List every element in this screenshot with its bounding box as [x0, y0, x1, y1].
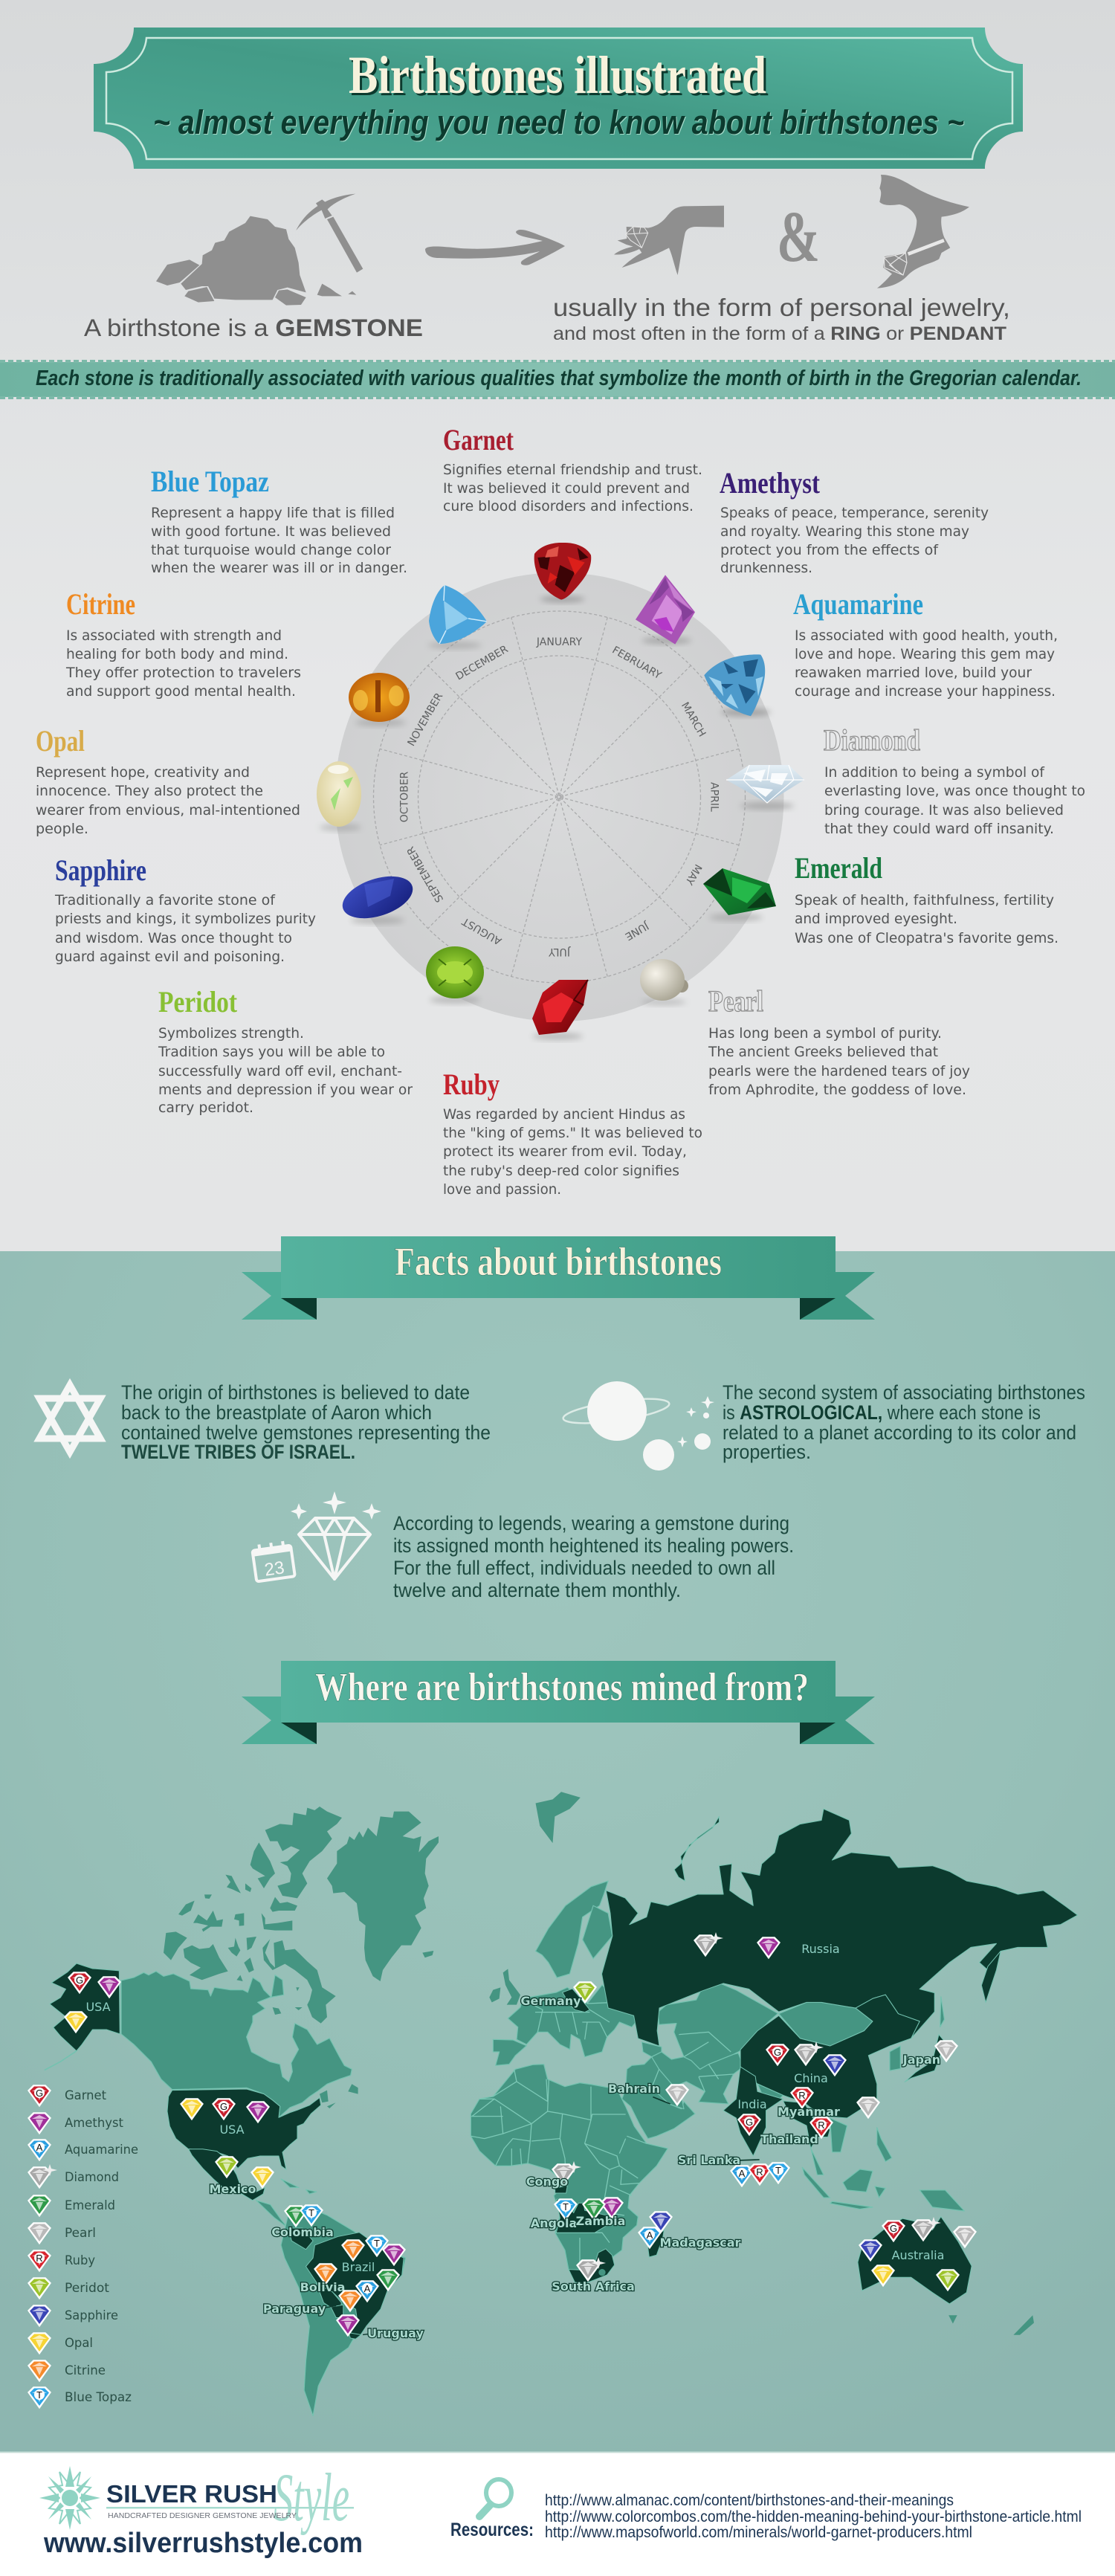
markers: Australia — [859, 2217, 976, 2291]
text block: blue topaz: Blue Topaz — [151, 465, 269, 498]
legend: R — [36, 2253, 43, 2264]
ribbon: facts about birthstones — [242, 1236, 875, 1320]
title banner — [94, 28, 1023, 169]
wheel of months — [334, 572, 783, 1021]
text block: diamond: bring courage. It was also believed — [824, 802, 1064, 819]
fact: twelve tribes: TWELVE TRIBES OF ISRAEL. — [121, 1441, 355, 1463]
text block: pearl — [708, 984, 970, 1098]
text block: opal: innocence. They also protect the — [36, 783, 263, 799]
text block: emerald: Speak of health, faithfulness, fertility — [795, 892, 1054, 908]
title: Birthstones illustrated — [349, 45, 766, 105]
markers: Russia, Germany and Asia: R — [798, 2090, 806, 2101]
legend: Sapphire — [65, 2308, 118, 2323]
text block: ruby: Ruby — [443, 1068, 500, 1101]
logo: silver rush style: SILVER RUSH — [106, 2480, 277, 2508]
month labels: MARCH — [679, 700, 708, 739]
text block: aquamarine: Aquamarine — [793, 587, 923, 621]
text block: aquamarine: courage and increase your happiness. — [795, 683, 1056, 700]
markers: Russia, Germany and Asia: Sri Lanka — [678, 2153, 740, 2167]
text block: peridot: successfully ward off evil, enchant- — [158, 1063, 402, 1079]
gem: emerald — [703, 868, 776, 921]
fact: astrological: is ASTROLOGICAL, where each stone is — [723, 1401, 1041, 1424]
markers: Russia, Germany and Asia: A — [739, 2168, 746, 2179]
gem: garnet — [534, 543, 591, 603]
month labels: APRIL — [708, 782, 720, 812]
text block: ruby: Was regarded by ancient Hindus as — [443, 1106, 685, 1123]
text block: sapphire: Traditionally a favorite stone of — [54, 892, 276, 908]
text block: opal: wearer from envious, mal-intentioned — [36, 802, 300, 819]
gem: amethyst — [636, 575, 695, 645]
resources: http://www.mapsofworld.com/minerals/world-garnet-producers.html — [545, 2524, 972, 2541]
markers: Africa — [526, 2161, 741, 2293]
month labels: DECEMBER — [454, 643, 511, 682]
markers: Russia, Germany and Asia: China — [794, 2071, 828, 2085]
text block: ruby: love and passion. — [443, 1181, 561, 1198]
fact: astrological: properties. — [723, 1441, 811, 1463]
gem: citrine — [349, 673, 410, 726]
map: Russia, Asia and Oceania — [536, 1792, 1078, 2335]
markers: South America: Paraguay — [263, 2302, 326, 2316]
fact: twelve tribes — [121, 1381, 491, 1463]
fact: twelve tribes: back to the breastplate of Aaron which — [121, 1401, 432, 1424]
text block: amethyst: and royalty. Wearing this stone may — [720, 523, 969, 540]
gem: opal — [317, 761, 361, 831]
legend: Garnet — [65, 2088, 106, 2103]
logo: silver rush style: www.silverrushstyle.com — [43, 2528, 363, 2559]
markers: Alaska: G — [76, 1975, 83, 1986]
markers: Russia, Germany and Asia: India — [737, 2097, 767, 2111]
text block: amethyst: drunkenness. — [720, 560, 812, 576]
text block: citrine: Is associated with strength and — [66, 627, 282, 644]
legend: A — [36, 2142, 43, 2153]
text block: peridot — [158, 985, 413, 1116]
text block: ruby: the ruby's deep-red color signifies — [443, 1163, 679, 1179]
text block: pearl: The ancient Greeks believed that — [708, 1044, 938, 1060]
text block: citrine — [65, 587, 301, 700]
logo: silver rush style: HANDCRAFTED DESIGNER GEMSTONE JEWELRY — [108, 2512, 297, 2520]
legend: T — [36, 2389, 42, 2401]
markers: Africa: Zambia — [576, 2214, 625, 2228]
icon: magnifier — [479, 2479, 511, 2517]
month labels: JULY — [549, 946, 571, 958]
markers: Africa: Congo — [526, 2175, 568, 2189]
markers: Russia, Germany and Asia: Japan — [902, 2053, 940, 2067]
markers: Alaska: USA — [85, 2000, 111, 2014]
legend: G — [36, 2088, 43, 2099]
text block: amethyst: Amethyst — [720, 466, 821, 500]
resources: http://www.colorcombos.com/the-hidden-meaning-behind-your-birthstone-article.html — [545, 2508, 1082, 2525]
resources: http://www.almanac.com/content/birthstones-and-their-meanings — [545, 2492, 954, 2509]
text block: garnet: Signifies eternal friendship and trust. — [443, 462, 702, 478]
legend: Amethyst — [65, 2116, 123, 2131]
text block: ruby: the "king of gems." It was believed to — [443, 1125, 702, 1141]
fact: legends: its assigned month heightened its healing powers. — [393, 1534, 794, 1557]
text block: diamond: everlasting love, was once thought to — [824, 783, 1085, 799]
footer background — [0, 2452, 1115, 2576]
legend: Blue Topaz — [65, 2390, 132, 2405]
text block: blue topaz: when the wearer was ill or in danger. — [151, 560, 407, 576]
markers: USA and Mexico: G — [220, 2101, 227, 2112]
icon: hand with ring — [614, 206, 724, 275]
legend: Citrine — [65, 2363, 106, 2378]
markers: USA and Mexico — [181, 2099, 274, 2196]
markers: Russia, Germany and Asia — [520, 1932, 957, 2186]
fact: legends: For the full effect, individuals needed to own all — [393, 1557, 775, 1579]
markers: South America: T — [308, 2207, 314, 2218]
text block: citrine: and support good mental health. — [66, 683, 296, 700]
text block: blue topaz: with good fortune. It was believed — [151, 523, 391, 540]
markers: South America: Colombia — [271, 2225, 334, 2239]
text: jewelry: and most often in the form of a RING or PENDANT — [553, 323, 1006, 344]
text block: emerald: Emerald — [795, 851, 882, 885]
text block: blue topaz — [151, 465, 407, 576]
text block: peridot: Symbolizes strength. — [158, 1025, 304, 1042]
icon: star of david — [39, 1385, 100, 1452]
gem: aquamarine — [704, 654, 771, 717]
text block: opal — [36, 724, 300, 837]
fact: astrological: related to a planet according to its color and — [723, 1421, 1076, 1444]
background: top gray section — [0, 0, 1115, 1256]
month labels: JANUARY — [536, 636, 583, 648]
text block: citrine: They offer protection to travelers — [65, 665, 301, 681]
fact: twelve tribes: contained twelve gemstones representing the — [121, 1421, 491, 1444]
legend: Emerald — [65, 2198, 115, 2213]
markers: Russia, Germany and Asia: T — [775, 2165, 781, 2176]
month labels — [398, 636, 720, 958]
text block: diamond: that they could ward off insanity. — [824, 821, 1054, 837]
title: Birthstones illustrated — [351, 48, 769, 107]
gem: pearl — [640, 959, 688, 1005]
text block: emerald: Was one of Cleopatra's favorite gems. — [795, 930, 1059, 946]
month labels: SEPTEMBER — [404, 844, 446, 904]
text block: sapphire: Sapphire — [55, 853, 146, 887]
text: jewelry: usually in the form of personal jewelry, — [553, 294, 1010, 321]
text block: ruby — [443, 1068, 702, 1198]
markers: South America: Uruguay — [367, 2326, 424, 2340]
fact: legends: According to legends, wearing a gemstone during — [393, 1512, 789, 1534]
legend: Opal — [65, 2336, 93, 2351]
text block: diamond: Diamond — [824, 723, 920, 757]
markers: Africa: Madagascar — [660, 2236, 741, 2250]
text block: opal: Opal — [36, 724, 85, 758]
month labels: FEBRUARY — [610, 645, 664, 682]
markers: South America: Brazil — [342, 2260, 375, 2274]
month labels: AUGUST — [460, 914, 504, 947]
text block: opal: people. — [36, 821, 88, 837]
subtitle: ~ almost everything you need to know about birthstones ~ — [153, 103, 964, 141]
ribbon: facts about birthstones: Facts about birthstones — [395, 1239, 722, 1284]
legend: Diamond — [65, 2170, 119, 2185]
text block: amethyst: protect you from the effects of — [720, 542, 939, 558]
fact: legends — [393, 1512, 794, 1601]
text block: opal: Represent hope, creativity and — [36, 764, 250, 781]
legend: Pearl — [65, 2226, 96, 2241]
text block: peridot: Tradition says you will be able to — [158, 1044, 385, 1060]
arrow — [425, 230, 565, 265]
markers: Russia, Germany and Asia: Bahrain — [608, 2082, 660, 2096]
text: jewelry — [553, 294, 1010, 344]
markers: South America: A — [364, 2283, 371, 2294]
text block: aquamarine: Is associated with good health, youth, — [795, 627, 1058, 644]
text block: amethyst — [720, 466, 989, 576]
text block: peridot: ments and depression if you wear or — [158, 1082, 413, 1098]
markers: South America: Bolivia — [300, 2280, 345, 2294]
gem: ruby — [532, 980, 588, 1040]
map: Alaska, Mexico and South America — [45, 1963, 405, 2416]
text block: aquamarine: love and hope. Wearing this gem may — [795, 646, 1055, 662]
markers: Russia, Germany and Asia: Germany — [520, 1994, 581, 2008]
markers: USA and Mexico: Mexico — [209, 2182, 256, 2196]
markers: Africa: Angola — [531, 2216, 577, 2230]
markers: Russia, Germany and Asia: G — [774, 2047, 781, 2058]
text block: pearl: Pearl — [708, 984, 763, 1018]
text block: peridot: Peridot — [158, 985, 238, 1019]
text block: sapphire: priests and kings, it symbolizes purity — [55, 911, 316, 927]
text block: garnet: It was believed it could prevent and — [443, 480, 690, 497]
ampersand: & — [777, 197, 820, 277]
gem: diamond — [726, 765, 804, 810]
text block: emerald: and improved eyesight. — [795, 911, 957, 927]
text block: aquamarine — [793, 587, 1058, 700]
legend: Aquamarine — [65, 2143, 138, 2157]
fact: legends: twelve and alternate them monthly. — [393, 1579, 681, 1601]
text block: emerald — [795, 851, 1059, 946]
text: a birthstone is a gemstone: A birthstone is a GEMSTONE — [84, 314, 423, 341]
ribbon: where are birthstones mined from — [242, 1661, 875, 1744]
markers: USA and Mexico: USA — [219, 2123, 245, 2137]
gem: sapphire — [337, 868, 418, 926]
text block: pearl: Has long been a symbol of purity. — [708, 1025, 942, 1042]
gem: peridot — [426, 946, 484, 1004]
text block: ruby: protect its wearer from evil. Today, — [443, 1143, 687, 1160]
text block: diamond: In addition to being a symbol of — [824, 764, 1045, 781]
markers: South America — [263, 2205, 424, 2340]
subtitle: ~ almost everything you need to know about birthstones ~ — [154, 104, 965, 142]
resources: Resources: — [450, 2519, 534, 2540]
markers: Alaska — [65, 1972, 120, 2033]
markers: Australia: G — [890, 2223, 897, 2234]
month labels: JUNE — [623, 919, 651, 942]
icon: neck with pendant — [877, 175, 969, 288]
text block: sapphire — [54, 853, 316, 965]
text block: pearl: from Aphrodite, the goddess of love. — [708, 1082, 966, 1098]
markers: Russia, Germany and Asia: Russia — [801, 1942, 840, 1956]
text block: blue topaz: Represent a happy life that is filled — [151, 505, 395, 521]
icon: diamond with sparkles and calendar — [251, 1491, 381, 1581]
text block: garnet: cure blood disorders and infections. — [443, 498, 694, 514]
legend — [28, 2085, 138, 2408]
gem: blue topaz — [428, 585, 487, 649]
text block: pearl: pearls were the hardened tears of joy — [708, 1063, 970, 1079]
markers: Africa: South Africa — [552, 2279, 635, 2293]
markers: Russia, Germany and Asia: Myanmar — [778, 2105, 840, 2119]
text block: amethyst: Speaks of peace, temperance, serenity — [720, 505, 989, 521]
text block: citrine: Citrine — [66, 587, 135, 621]
map: Europe, Africa and the Middle East — [471, 1969, 778, 2284]
text block: blue topaz: that turquoise would change color — [151, 542, 391, 558]
markers: Africa: A — [647, 2230, 653, 2241]
markers: Russia, Germany and Asia: Thailand — [760, 2132, 818, 2146]
icon: rock and pickaxe — [156, 194, 363, 306]
map: Greenland, Canada and the USA — [121, 1807, 439, 2169]
markers: Russia, Germany and Asia: G — [746, 2117, 753, 2128]
markers: South America: T — [374, 2238, 380, 2249]
text block: sapphire: and wisdom. Was once thought to — [55, 930, 292, 946]
month labels: MAY — [682, 862, 704, 887]
logo: silver rush style — [39, 2459, 363, 2559]
text block: citrine: healing for both body and mind. — [66, 646, 288, 662]
strip: description — [0, 361, 1115, 398]
icon: diamond with sparkles and calendar: 23 — [263, 1557, 285, 1581]
markers: Russia, Germany and Asia: R — [818, 2120, 825, 2131]
markers: Australia: Australia — [892, 2248, 944, 2262]
text block: peridot: carry peridot. — [158, 1100, 253, 1116]
legend: Ruby — [65, 2253, 95, 2268]
text block: garnet — [443, 423, 702, 514]
month labels: NOVEMBER — [405, 691, 445, 749]
text block: sapphire: guard against evil and poisoning. — [55, 949, 285, 965]
ribbon: where are birthstones mined from: Where are birthstones mined from? — [315, 1665, 809, 1709]
resources — [450, 2492, 1082, 2541]
text block: diamond — [824, 723, 1085, 837]
text block: garnet: Garnet — [443, 423, 514, 456]
markers: Russia, Germany and Asia: R — [756, 2166, 763, 2178]
legend: Peridot — [65, 2281, 109, 2296]
text block: aquamarine: reawaken married love, build your — [795, 665, 1032, 681]
month labels: OCTOBER — [398, 771, 410, 822]
logo: silver rush style: Style — [274, 2459, 349, 2535]
fact: astrological — [723, 1381, 1085, 1463]
background: teal section — [0, 1251, 1115, 2452]
icon: planets — [562, 1381, 714, 1471]
fact: twelve tribes: The origin of birthstones is believed to date — [121, 1381, 470, 1404]
markers: Africa: T — [563, 2201, 569, 2212]
